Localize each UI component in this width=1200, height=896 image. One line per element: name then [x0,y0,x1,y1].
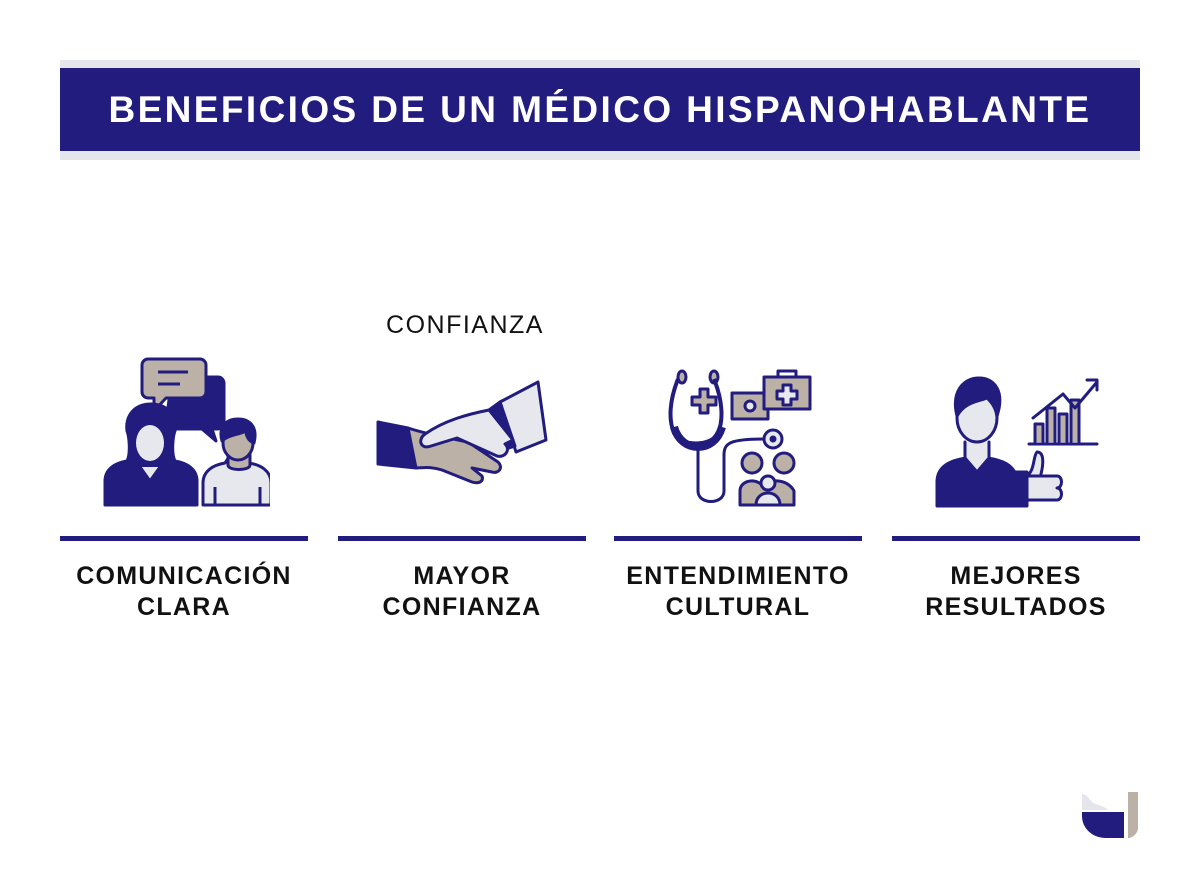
label: entendimiento cultural [626,562,850,621]
divider line 1 [60,536,308,541]
label: mejores resultados: MEJORES [950,562,1082,590]
title bar [60,60,1140,160]
title: BENEFICIOS DE UN MÉDICO HISPANOHABLANTE [108,89,1092,130]
label: mejores resultados [925,562,1107,621]
icon: better results [936,376,1099,508]
icon: handshake [376,380,548,484]
heading: confianza: CONFIANZA [386,311,544,339]
title [60,68,1140,151]
icon: cultural understanding [668,370,812,506]
logo [1082,792,1138,838]
label: mayor confianza: CONFIANZA [383,593,541,621]
icon: communication [104,358,270,506]
divider line 4 [892,536,1140,541]
label: comunicación clara: COMUNICACIÓN [76,562,292,590]
divider line 3 [614,536,862,541]
label: entendimiento cultural: ENTENDIMIENTO [626,562,850,590]
label: comunicación clara: CLARA [137,593,231,621]
label: mayor confianza: MAYOR [413,562,511,590]
label: comunicación clara [76,562,292,621]
label: entendimiento cultural: CULTURAL [666,593,810,621]
label: mayor confianza [383,562,541,621]
divider line 2 [338,536,586,541]
label: mejores resultados: RESULTADOS [925,593,1107,621]
